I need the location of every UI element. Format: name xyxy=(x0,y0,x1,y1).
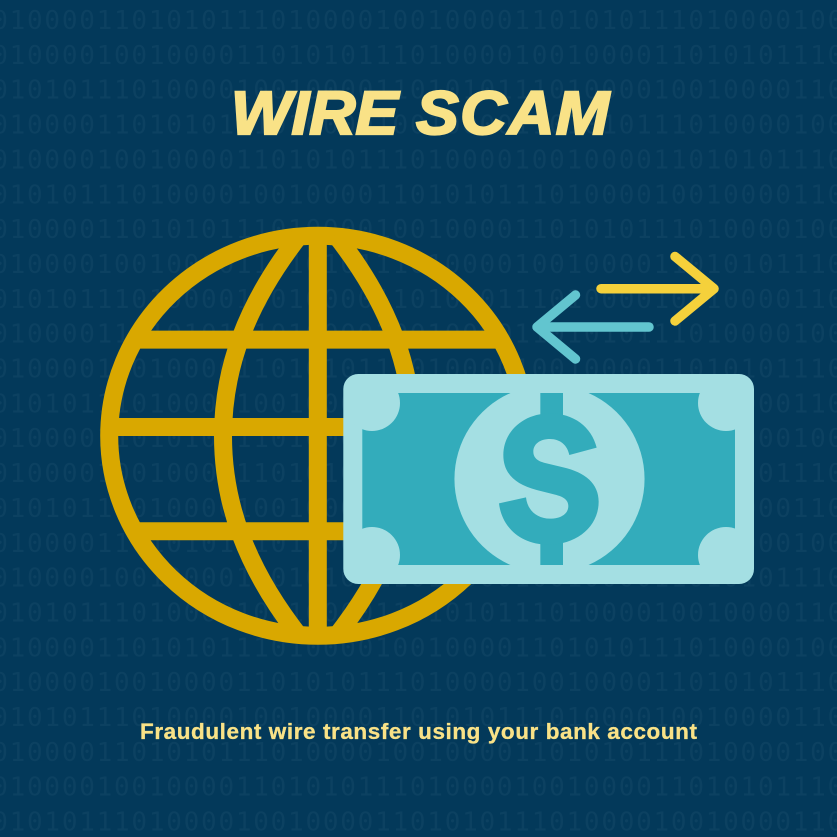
bill outer frame xyxy=(343,374,754,584)
icon: globe xyxy=(105,235,530,637)
bill inner panel xyxy=(362,393,735,565)
title: WIRE SCAM xyxy=(231,79,611,148)
bill center medallion xyxy=(454,393,645,565)
arrow: outgoing yellow xyxy=(601,256,714,321)
bill corner circles xyxy=(344,375,754,583)
arrow: incoming teal xyxy=(537,295,649,359)
subtitle: Fraudulent wire transfer using your bank account xyxy=(140,719,698,744)
dollar sign xyxy=(499,393,599,565)
icon: dollar bill xyxy=(343,374,754,584)
